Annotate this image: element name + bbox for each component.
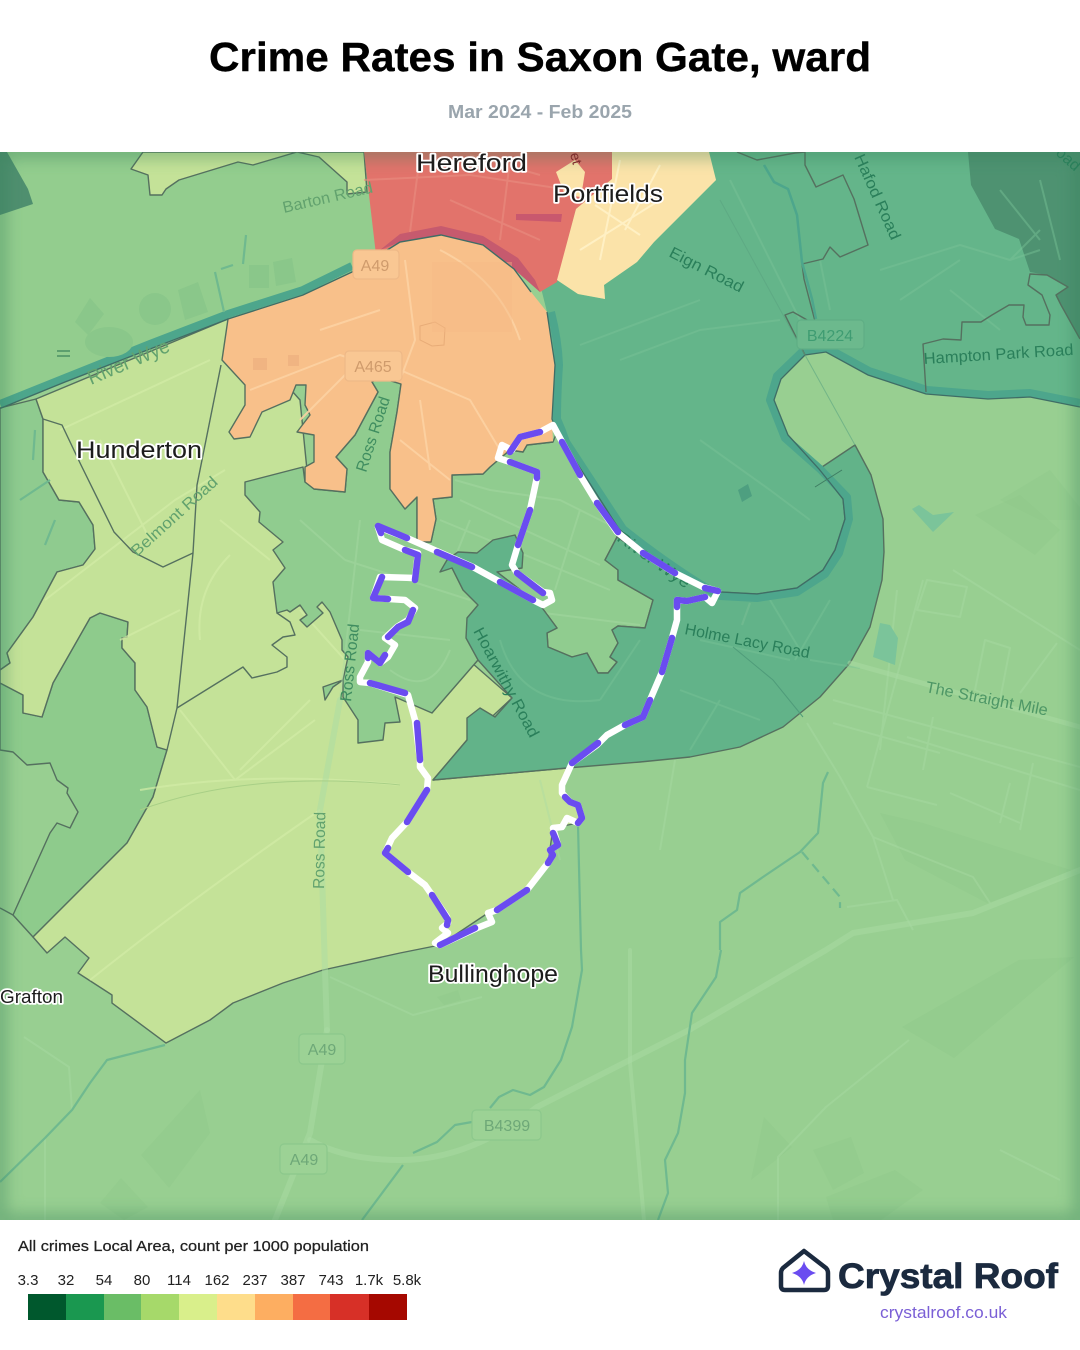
central area roads [300,480,640,700]
ponds and park shapes [57,258,954,665]
label: street fragment in Hereford: et [567,151,586,166]
cream streets [580,160,660,260]
shield: B4224 [797,320,864,349]
legend value labels: 387 [280,1272,306,1289]
place: Hereford: Hereford [416,150,527,177]
region: north-east dark green [540,152,1080,594]
place: Grafton: Grafton [0,987,63,1007]
shield: A49 north: A49 [361,258,389,275]
place labels [0,150,663,1007]
red district bar [516,214,562,222]
label: The Straight Mile: The Straight Mile [924,679,1049,720]
region: Portfields cream [557,152,716,299]
region: north-west green [0,152,376,408]
shield: B4224: B4224 [807,328,853,345]
orange edge lines [222,319,553,542]
lime interior roads [45,360,400,980]
legend value labels: 5.8k [393,1272,422,1289]
streams [0,235,840,1220]
label: Eign Road: Eign Road [666,244,746,296]
region: central mid green [245,374,653,743]
label: Ross Road lower: Ross Road [311,812,329,889]
label: Ross Road middle: Ross Road [338,623,363,702]
shield: A465: A465 [354,359,392,376]
region: top lime [131,152,367,195]
legend value labels: 237 [242,1272,268,1289]
shield: A49 south [299,1034,345,1064]
place: Hunderton: Hunderton [76,437,202,464]
legend value labels [18,1272,422,1289]
shield: A49 lower: A49 [290,1152,318,1169]
cream blob behind labels [556,160,585,197]
label: River Wye east: River Wye [614,529,693,592]
legend value labels: 114 [167,1272,191,1289]
shield: A49 north [353,250,399,279]
north-east ward outlines [0,152,1080,915]
brand logo [781,1251,1058,1322]
shield: A465 [345,351,402,381]
orange roads and building [250,250,520,480]
region: Hereford red [364,152,612,292]
legend value labels: 80 [134,1272,150,1289]
legend value labels: 54 [96,1272,112,1289]
subtitle: date range: Mar 2024 - Feb 2025 [448,101,632,122]
lower right roads and fields [24,470,1080,1220]
shield: B4399 [472,1110,541,1140]
region: south bend dark green [433,445,884,780]
shield: B4399: B4399 [484,1118,530,1135]
shield: A49 south: A49 [308,1042,336,1059]
label: Holme Lacy Road: Holme Lacy Road [683,621,811,662]
legend value labels: 3.3 [18,1272,38,1289]
dark area roads [500,180,1060,750]
map base area [0,152,1080,1220]
legend value labels: 1.7k [355,1272,384,1289]
road labels [84,144,1080,889]
map panel [0,144,1080,1222]
region: top right darkest [968,152,1080,339]
road shields [280,250,864,1174]
vignette [0,150,1080,1222]
brand name: Crystal Roof [838,1257,1058,1296]
red darker river band [380,226,540,292]
place: Portfields: Portfields [553,181,663,208]
red streets [364,155,570,240]
legend colour scale [28,1294,407,1320]
Ross Road main carriageway [320,700,340,1030]
region: lime composite [0,319,582,1043]
brand url: crystalroof.co.uk [880,1304,1008,1322]
boundary white line [360,425,718,945]
label: Hoarwithy Road: Hoarwithy Road [469,625,542,741]
shield: A49 lower [280,1144,327,1174]
region: Saxon Gate orange [222,235,555,542]
label: Ross Road upper: Ross Road [354,395,394,474]
label: Hafod Road: Hafod Road [850,152,903,243]
label: Hampton Park Road: Hampton Park Road [923,342,1074,368]
legend value labels: 162 [204,1272,230,1289]
legend value labels: 32 [58,1272,74,1289]
river wye [0,235,1080,598]
label: Belmont Road: Belmont Road [128,474,221,560]
region: west mid green [0,399,95,670]
icon: house with sparkle [781,1251,828,1290]
region: top left dark corner [0,152,33,215]
title: Crime Rates in Saxon Gate, ward [209,34,871,80]
label: River Wye west: River Wye [84,335,173,390]
place: Bullinghope: Bullinghope [428,961,558,988]
legend title: All crimes Local Area, count per 1000 population [18,1238,369,1255]
region: south-west mid green [0,613,167,937]
saxon gate ward boundary [360,425,718,945]
district lines within lime [43,365,400,810]
label: Barton Road: Barton Road [281,180,375,217]
legend [18,1238,422,1320]
legend value labels: 743 [318,1272,344,1289]
boundary purple dashes [368,432,718,945]
